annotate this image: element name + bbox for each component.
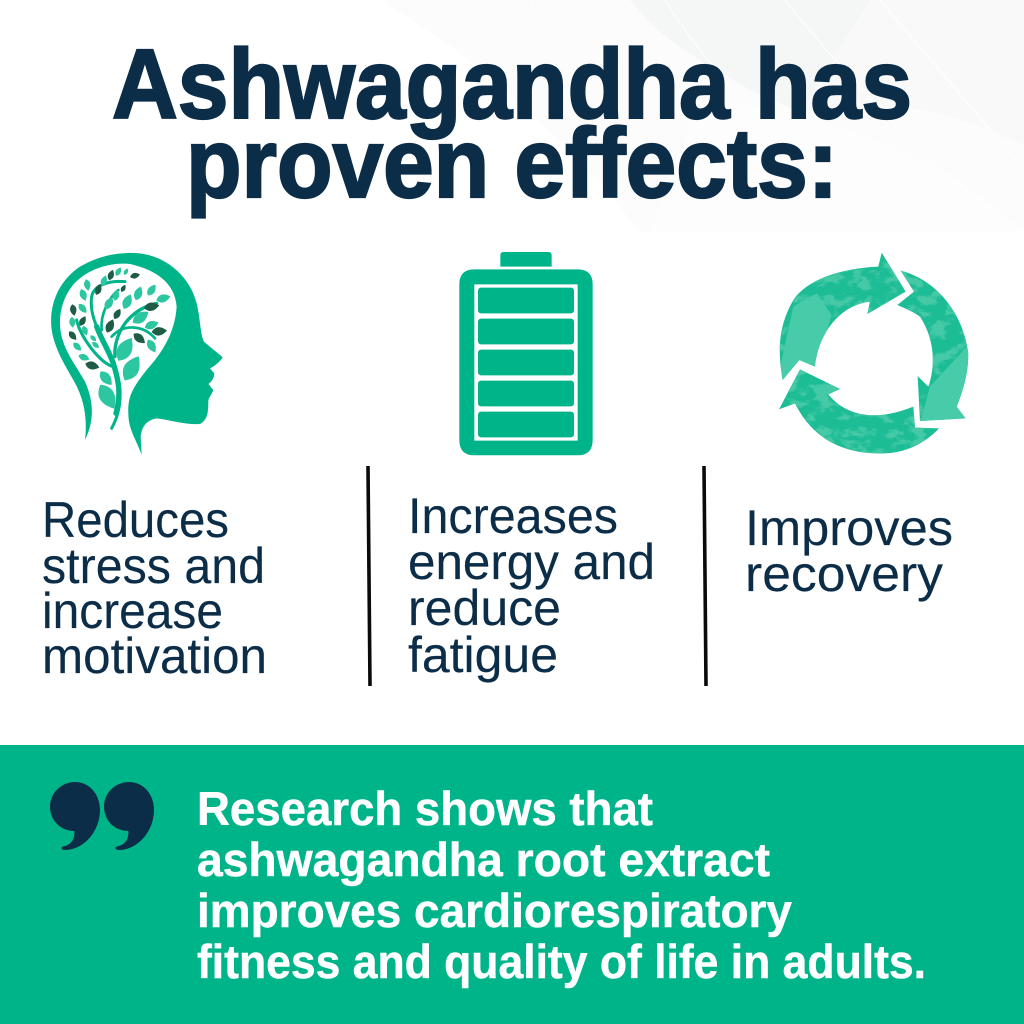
icon: head with tree	[51, 253, 223, 455]
text: improves recovery: recovery	[745, 546, 943, 602]
quote text: fitness and quality of life in adults.	[197, 936, 926, 989]
quote text: ashwagandha root extract	[197, 834, 770, 887]
quote text: improves cardiorespiratory	[197, 885, 793, 938]
title: proven effects:	[186, 108, 838, 218]
text: increases energy: reduce	[408, 580, 561, 636]
panel: improves recovery	[745, 247, 973, 602]
text: increases energy: fatigue	[408, 627, 558, 683]
title	[112, 29, 912, 218]
text: increases energy: energy and	[408, 534, 655, 590]
text: increases energy	[408, 488, 655, 683]
background: top decorative panel	[0, 0, 1024, 232]
panel: research quote	[0, 745, 1024, 1024]
text: reduces stress: Reduces	[42, 492, 229, 548]
panel: reduces stress	[42, 253, 267, 684]
text: improves recovery	[745, 500, 953, 602]
quote text	[197, 783, 926, 989]
text: reduces stress: increase	[42, 583, 223, 639]
icon: battery	[459, 252, 593, 455]
text: reduces stress: motivation	[42, 628, 267, 684]
text: increases energy: Increases	[408, 488, 618, 544]
icon: quotation marks	[50, 782, 154, 850]
text: improves recovery: Improves	[745, 500, 953, 556]
text: reduces stress: stress and	[42, 538, 265, 594]
panel: increases energy	[408, 252, 655, 683]
quote text: Research shows that	[197, 783, 653, 836]
title: Ashwagandha has	[112, 29, 912, 139]
text: reduces stress	[42, 492, 267, 684]
icon: recycling arrows	[779, 252, 968, 454]
